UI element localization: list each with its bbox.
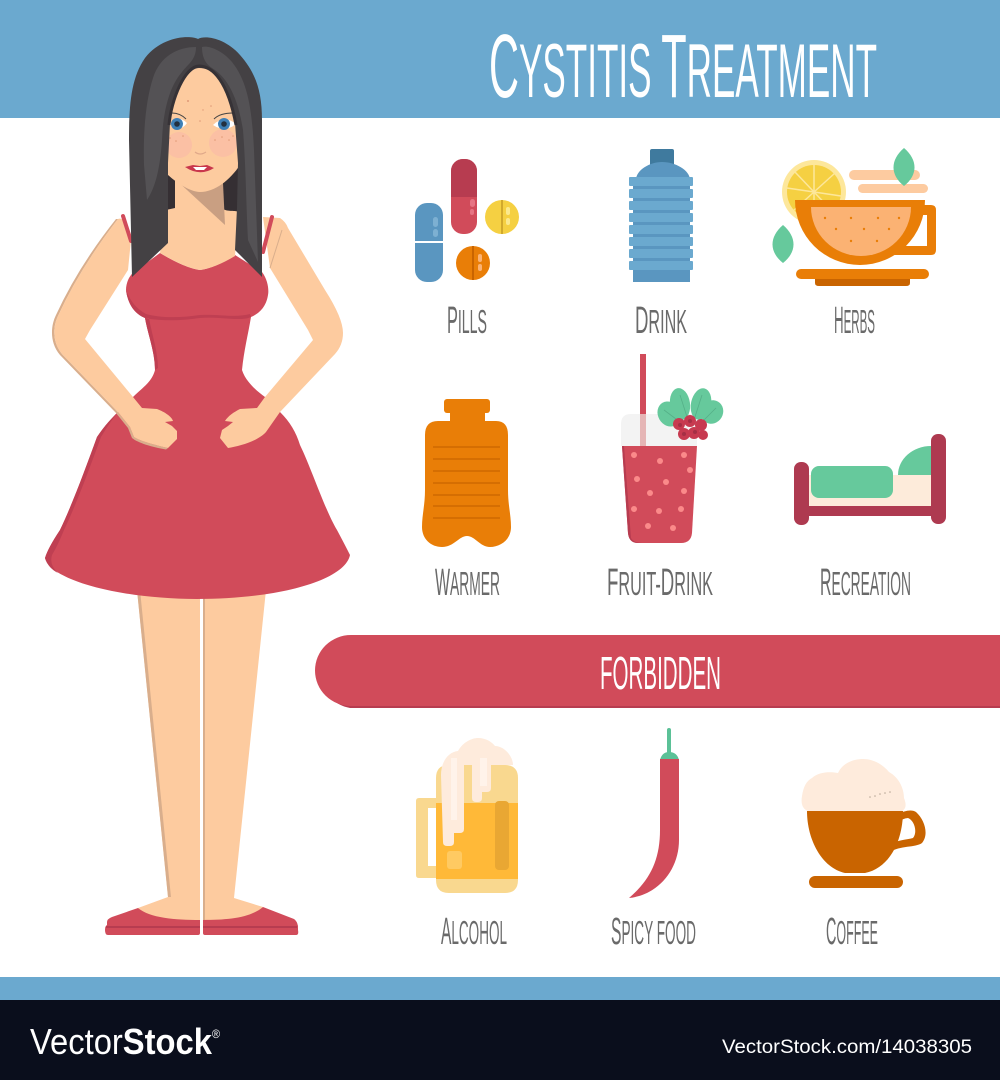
treatment item: drink bottle xyxy=(629,149,693,282)
text: COFFEE xyxy=(826,911,878,953)
text: WARMER xyxy=(435,562,500,604)
footer watermark bar: ® xyxy=(212,1027,220,1041)
hair highlights xyxy=(144,47,258,262)
footer watermark bar xyxy=(0,1000,1000,1080)
text: ALCOHOL xyxy=(441,911,507,953)
eyes xyxy=(170,113,236,130)
legs xyxy=(137,590,200,921)
right arm crease xyxy=(270,230,282,268)
hair parting shadow xyxy=(169,66,236,125)
leg edge shading xyxy=(137,590,205,921)
freckles xyxy=(169,100,234,142)
label: pills: PILLS xyxy=(447,300,487,342)
forbidden item: chili pepper xyxy=(629,728,679,898)
label: drink: DRINK xyxy=(635,300,687,342)
treatment item: fruit drink xyxy=(621,354,728,543)
hair mass xyxy=(129,37,262,277)
forbidden banner xyxy=(315,635,1000,708)
neck and chest xyxy=(160,170,238,270)
neck shadow xyxy=(174,178,225,225)
left arm shadow xyxy=(52,219,168,450)
text: SPICY FOOD xyxy=(611,911,696,953)
header band xyxy=(0,0,1000,118)
dress shading xyxy=(45,290,251,573)
footer watermark bar: VectorStock.com/14038305 xyxy=(722,1037,972,1058)
forbidden item: beer xyxy=(416,738,518,893)
nose xyxy=(195,152,206,154)
cheeks xyxy=(166,132,192,158)
text: HERBS xyxy=(834,300,875,342)
treatment item: bed xyxy=(794,434,946,525)
face xyxy=(166,66,240,192)
bottom band xyxy=(0,977,1000,1000)
treatment item: hot water bottle xyxy=(422,399,511,547)
right arm xyxy=(220,217,343,448)
forbidden item: coffee xyxy=(802,759,926,888)
mouth xyxy=(185,165,214,172)
treatment item: pills xyxy=(415,159,519,282)
woman figure xyxy=(45,37,350,935)
label: fruit-drink: FRUIT-DRINK xyxy=(607,562,713,604)
back hair xyxy=(165,160,240,212)
treatment item: herbal tea xyxy=(772,148,936,286)
left arm xyxy=(54,219,177,448)
forbidden banner: FORBIDDEN xyxy=(600,647,721,699)
dress straps xyxy=(123,216,272,252)
shoes xyxy=(105,908,200,935)
red dress xyxy=(45,253,350,599)
footer watermark bar: VectorStock xyxy=(30,1021,221,1062)
